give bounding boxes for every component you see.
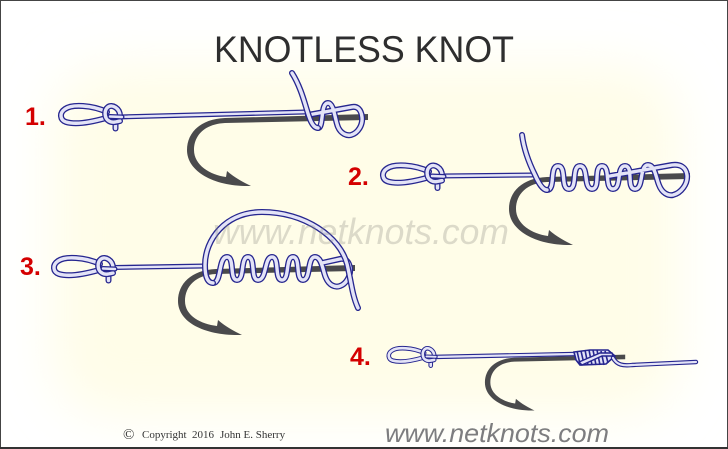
wraps 1 (292, 73, 362, 135)
step 3 number: 3. (20, 253, 41, 281)
copyright: Copyright (142, 429, 187, 441)
copyright: John E. Sherry (220, 429, 286, 441)
title: KNOTLESS KNOT (214, 29, 514, 70)
step 1 diagram (61, 73, 368, 186)
line and loop 1 (61, 106, 305, 128)
step 3 diagram (54, 212, 358, 335)
step 2 number: 2. (348, 163, 369, 191)
step 2 diagram (383, 135, 690, 245)
hook 4 (485, 355, 625, 410)
line and loop 4 (389, 348, 575, 366)
hook 3 (178, 265, 355, 335)
step 4 number: 4. (350, 343, 371, 371)
copyright (123, 427, 286, 443)
watermark: www.netknots.com (213, 211, 509, 252)
line and loop 3 (54, 258, 205, 280)
copyright: © (123, 427, 134, 443)
coils 3 (205, 212, 358, 308)
step 1 number: 1. (25, 103, 46, 131)
coils 2 (522, 135, 687, 195)
snelled coil 4 (574, 350, 615, 365)
step 4 diagram (389, 348, 696, 410)
line and loop 2 (383, 165, 532, 188)
hook 1 (187, 114, 368, 186)
website url: www.netknots.com (385, 418, 609, 448)
hook 2 (509, 173, 690, 245)
tail 4 (613, 358, 696, 365)
copyright: 2016 (192, 429, 214, 441)
